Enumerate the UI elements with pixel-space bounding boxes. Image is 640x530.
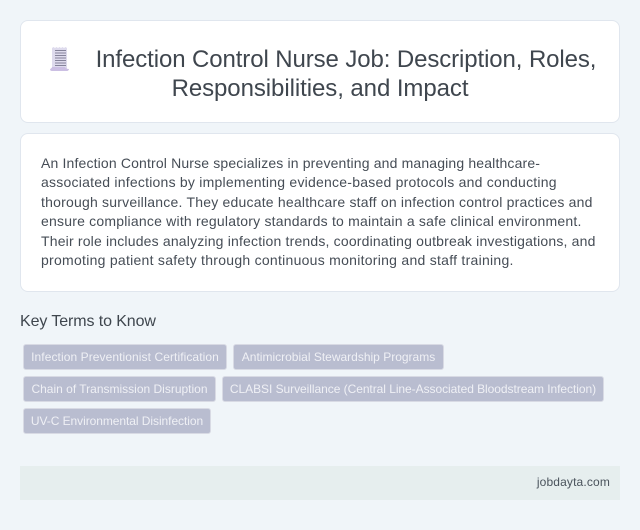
- summary card: [20, 133, 620, 292]
- tag: stewardship: Antimicrobial Stewardship Programs: [242, 350, 435, 364]
- tag: CLABSI: [222, 376, 604, 402]
- tag: chain of transmission: Chain of Transmission Disruption: [31, 382, 208, 396]
- summary text: associated infections by implementing evidence-based protocols and conducting: [41, 174, 557, 190]
- tag: UV-C: UV-C Environmental Disinfection: [31, 414, 203, 428]
- title: Responsibilities, and Impact: [172, 75, 468, 102]
- summary text: ensure compliance with regulatory standards to maintain a safe clinical environment.: [41, 213, 582, 229]
- summary text: Their role includes analyzing infection trends, coordinating outbreak investigations, and: [41, 233, 596, 249]
- tag: stewardship: [233, 344, 444, 370]
- tag: chain of transmission: [23, 376, 216, 402]
- summary text: thorough surveillance. They educate healthcare staff on infection control practices and: [41, 194, 593, 210]
- header card: [20, 20, 620, 123]
- tag: CLABSI: CLABSI Surveillance (Central Line-Associated Bloodstream Infection): [230, 382, 596, 396]
- heading: key terms: Key Terms to Know: [20, 313, 156, 330]
- tag: certification: Infection Preventionist Certification: [31, 350, 219, 364]
- summary text: promoting patient safety through continuous monitoring and staff training.: [41, 252, 514, 268]
- title: Infection Control Nurse Job: Description, Roles,: [96, 46, 596, 73]
- icon: document scroll: [50, 47, 69, 71]
- tag: UV-C: [23, 408, 211, 434]
- tag list: [23, 344, 604, 434]
- footer: [20, 466, 620, 500]
- title: [96, 46, 596, 102]
- summary text: [41, 155, 596, 268]
- tag: certification: [23, 344, 227, 370]
- summary text: An Infection Control Nurse specializes in preventing and managing healthcare-: [41, 155, 540, 171]
- footer link text: jobdayta.com: [537, 475, 610, 489]
